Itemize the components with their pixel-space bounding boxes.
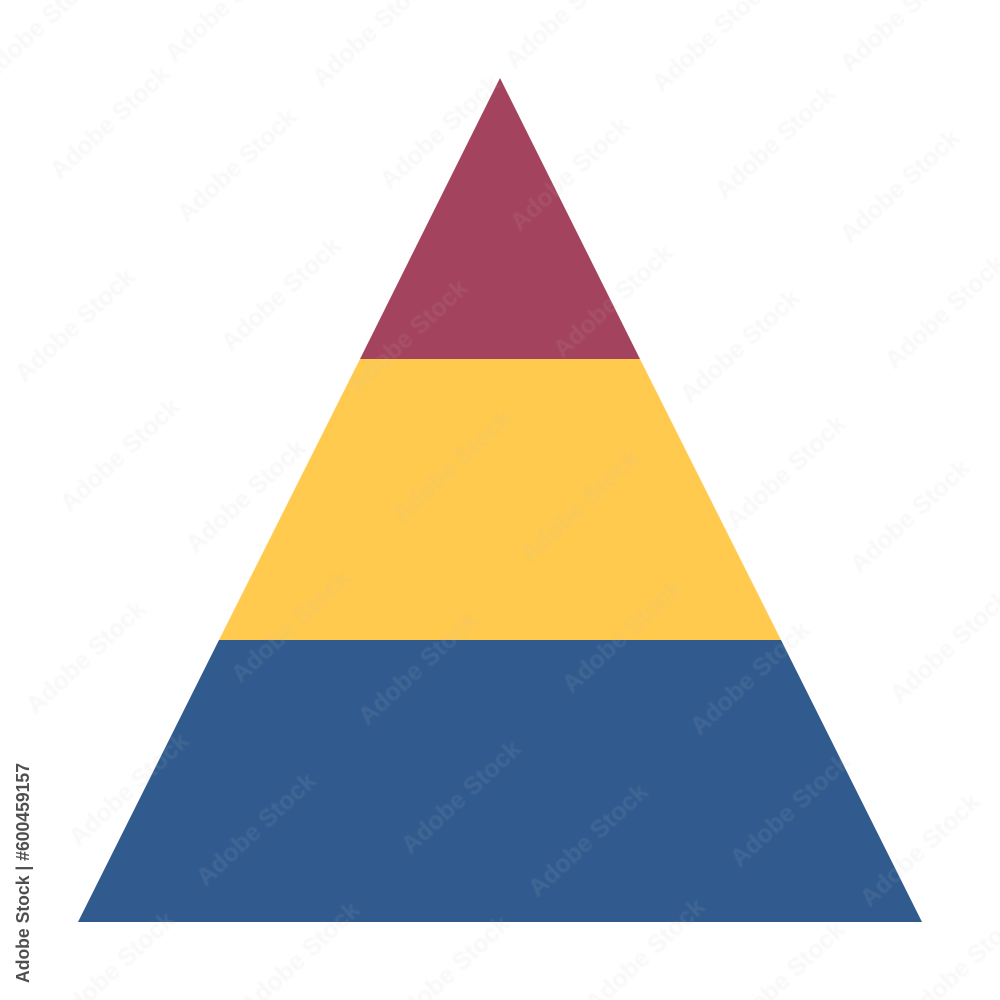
watermark pattern: Adobe Stock	[523, 778, 654, 902]
watermark pattern: Adobe Stock	[548, 239, 679, 363]
watermark pattern: Adobe Stock	[835, 124, 966, 248]
pyramid tier: middle yellow	[219, 359, 781, 640]
stock id label: Adobe Stock | #600459157	[13, 763, 33, 983]
watermark pattern: Adobe Stock	[375, 70, 506, 194]
watermark pattern: Adobe Stock	[557, 574, 688, 698]
watermark pattern: Adobe Stock	[515, 444, 646, 568]
pyramid tier: bottom blue	[78, 640, 922, 922]
watermark pattern: Adobe Stock	[45, 60, 176, 184]
watermark pattern: Adobe Stock	[226, 564, 357, 688]
watermark pattern: Adobe Stock	[396, 735, 527, 859]
watermark pattern: Adobe Stock	[191, 767, 322, 891]
watermark pattern: Adobe Stock	[675, 284, 806, 408]
pyramid	[78, 78, 922, 922]
watermark pattern: Adobe Stock	[725, 748, 856, 872]
watermark pattern: Adobe Stock	[710, 80, 841, 204]
watermark pattern: Adobe Stock	[845, 454, 976, 578]
watermark pattern: Adobe Stock	[343, 274, 474, 398]
watermark pattern: Adobe Stock	[721, 410, 852, 534]
watermark pattern: Adobe Stock	[172, 103, 303, 227]
pyramid tier: top maroon	[360, 78, 640, 359]
watermark pattern: Adobe Stock	[181, 434, 312, 558]
watermark pattern: Adobe Stock	[505, 112, 636, 236]
watermark pattern: Adobe Stock	[55, 393, 186, 517]
watermark pattern: Adobe Stock	[64, 727, 195, 851]
watermark pattern: Adobe Stock	[685, 616, 816, 740]
watermark pattern: Adobe Stock	[387, 404, 518, 528]
watermark pattern: Adobe Stock	[216, 232, 347, 356]
watermark pattern: Adobe Stock	[353, 606, 484, 730]
watermark pattern: Adobe Stock	[10, 263, 141, 387]
watermark pattern: Adobe Stock	[855, 788, 986, 912]
watermark pattern: Adobe Stock	[21, 595, 152, 719]
